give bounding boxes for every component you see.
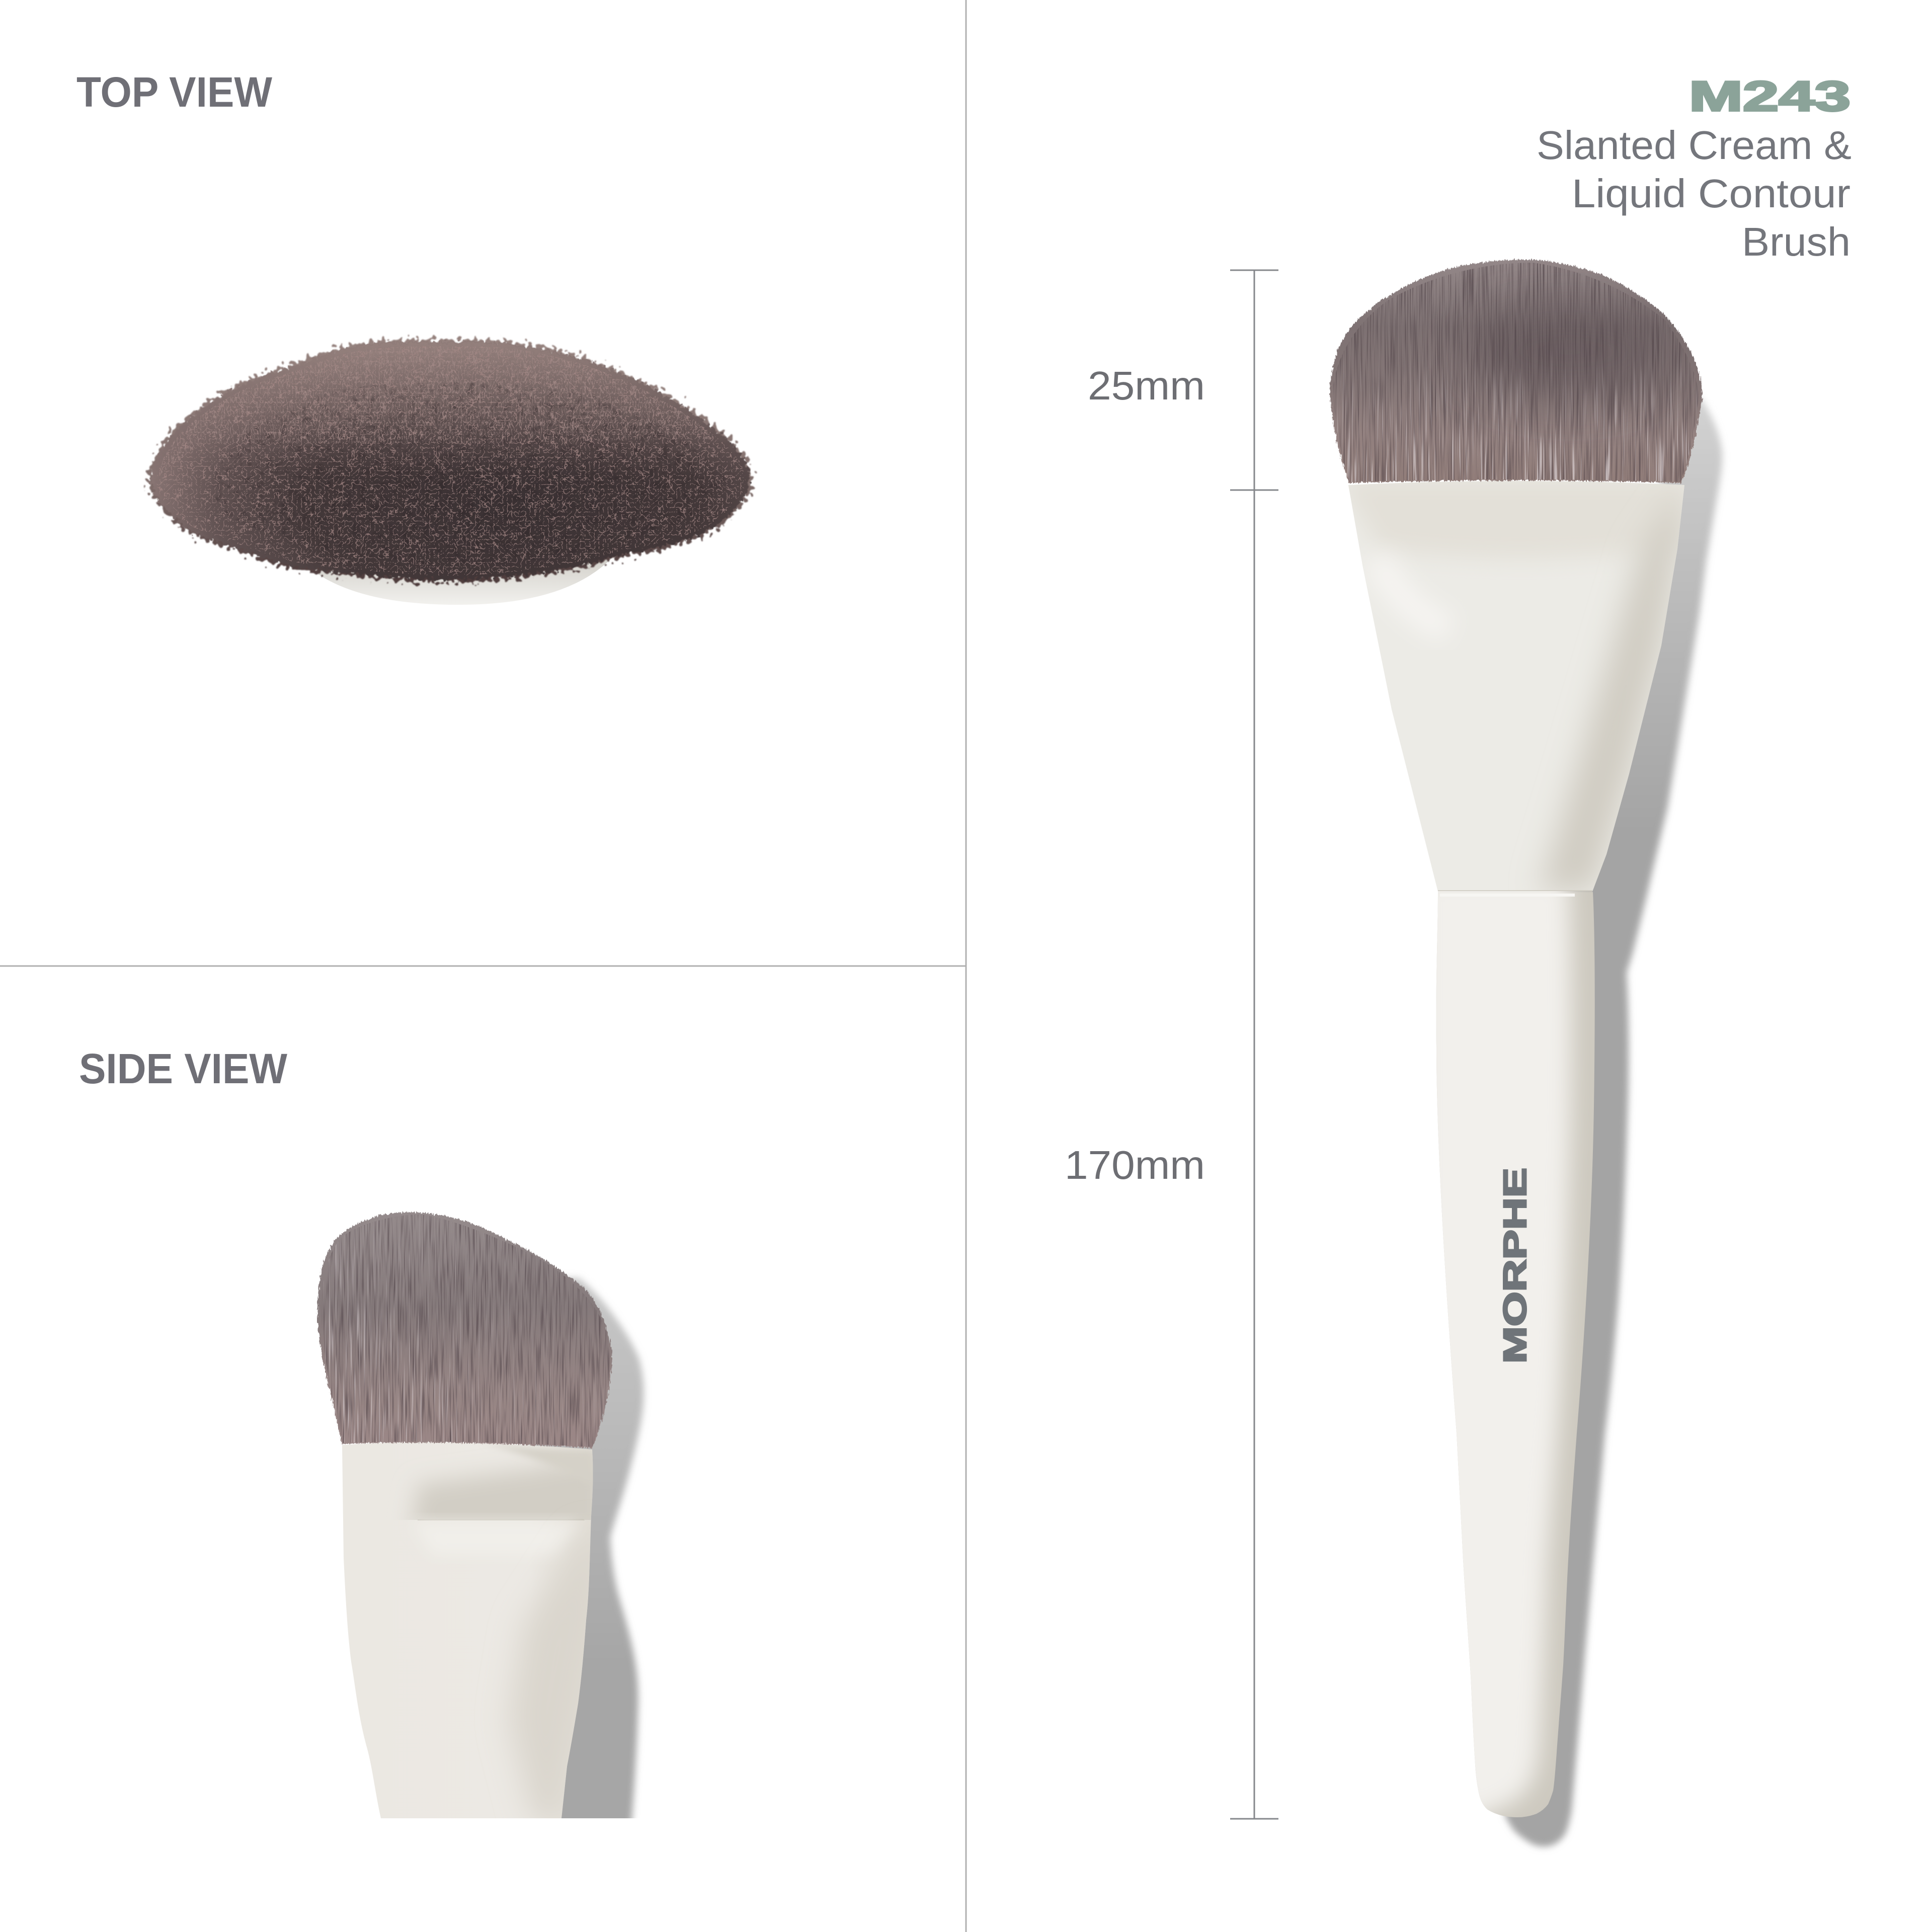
product code: M243 [1689, 72, 1850, 120]
dimension ruler [1065, 270, 1278, 1819]
product name line 2: Liquid Contour [1572, 171, 1850, 216]
product title block [1537, 72, 1852, 264]
product name line 3: Brush [1742, 219, 1850, 264]
panel: top view [76, 68, 750, 605]
handle [1436, 891, 1595, 1817]
ferrule [1338, 478, 1691, 892]
panel: side view [79, 1045, 643, 1831]
cast shadow [1499, 392, 1722, 1846]
bristles [1330, 260, 1702, 483]
full brush illustration [1330, 260, 1722, 1846]
handle length label: 170mm [1065, 1143, 1205, 1187]
bristle tuft [151, 342, 750, 580]
brand name on handle: MORPHE [1497, 1168, 1533, 1363]
product name line 1: Slanted Cream & [1537, 123, 1852, 168]
bristles [317, 1212, 612, 1448]
ferrule [342, 1442, 604, 1821]
brush head seen from above [151, 342, 750, 605]
ferrule base under bristles [307, 558, 611, 605]
cast shadow [528, 1278, 643, 1831]
brush seen from the side [317, 1212, 643, 1831]
panel: full brush with dimensions [1065, 72, 1852, 1846]
heading: top view: TOP VIEW [76, 68, 273, 116]
heading: side view: SIDE VIEW [79, 1045, 288, 1092]
bristle length label: 25mm [1088, 363, 1205, 408]
